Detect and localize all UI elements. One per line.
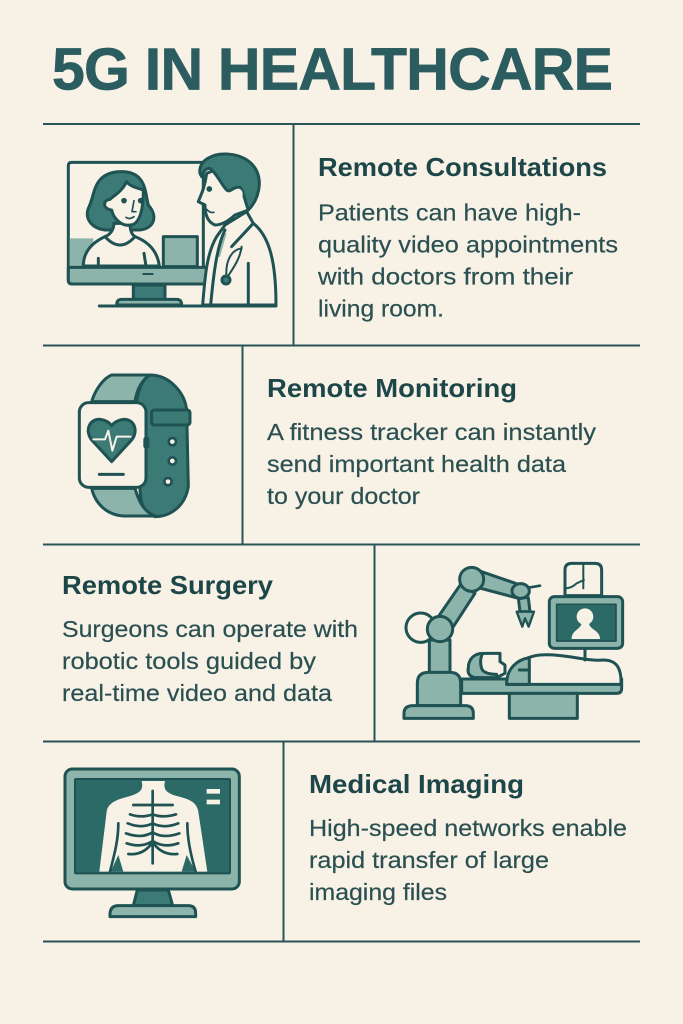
text: remote consultations description: living room. <box>318 296 444 322</box>
text: remote surgery description <box>62 616 358 706</box>
text: remote consultations description <box>317 200 618 322</box>
panel: medical imaging <box>65 769 627 917</box>
panel: remote monitoring <box>79 373 596 517</box>
text: remote surgery description: robotic tools guided by <box>62 648 316 674</box>
text: remote monitoring description <box>267 419 596 509</box>
text: remote consultations description: quality video appointments <box>318 232 618 258</box>
text: remote consultations description: Patients can have high- <box>318 200 581 226</box>
icon: surgical robot <box>404 563 623 718</box>
text: medical imaging description: High-speed networks enable <box>309 815 627 841</box>
heading: medical imaging: Medical Imaging <box>309 769 524 799</box>
heading: remote monitoring: Remote Monitoring <box>267 373 517 403</box>
text: medical imaging description: rapid transfer of large <box>309 847 549 873</box>
text: remote consultations description: with doctors from their <box>317 264 573 290</box>
panel: remote consultations <box>68 152 618 322</box>
heading: remote surgery: Remote Surgery <box>62 570 274 600</box>
text: remote monitoring description: send important health data <box>267 451 567 477</box>
text: remote surgery description: real-time video and data <box>62 680 333 706</box>
icon: fitness tracker <box>79 375 190 517</box>
panel: remote surgery <box>62 563 623 718</box>
title: 5G IN HEALTHCARE <box>52 36 613 102</box>
text: remote monitoring description: to your doctor <box>267 483 420 509</box>
text: remote monitoring description: A fitness tracker can instantly <box>267 419 596 445</box>
text: remote surgery description: Surgeons can operate with <box>62 616 358 642</box>
icon: video consultation <box>68 154 276 306</box>
heading: remote consultations: Remote Consultations <box>318 152 607 182</box>
text: medical imaging description <box>309 815 627 905</box>
text: medical imaging description: imaging files <box>309 879 447 905</box>
icon: chest x-ray monitor <box>65 769 239 917</box>
